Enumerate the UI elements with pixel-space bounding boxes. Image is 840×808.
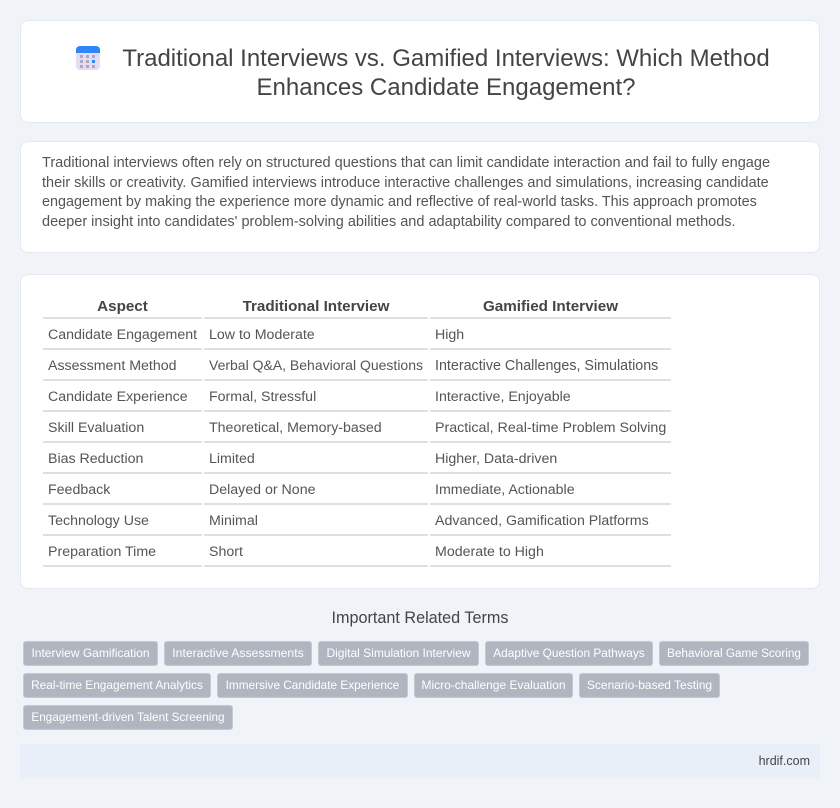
comparison table: Higher, Data-driven [435,451,557,467]
comparison table [43,298,671,567]
comparison table: Interactive Challenges, Simulations [435,358,658,374]
header: Gamified Interview: Gamified Interview [483,298,618,315]
comparison table: Candidate Engagement [48,327,197,343]
comparison table: Bias Reduction [48,451,143,467]
comparison table: High [435,327,464,343]
comparison table: Low to Moderate [209,327,315,343]
related term chips: Digital Simulation Interview [326,646,471,660]
footer bar [20,744,820,778]
intro text: engagement by making the experience more dynamic and reflective of real-world tasks. This approach promotes [42,194,757,210]
related term chips: Behavioral Game Scoring [667,647,801,660]
comparison table: Minimal [209,513,258,529]
comparison table: Feedback [48,482,110,498]
footer source: hrdif.com [759,754,810,768]
comparison table: Moderate to High [435,544,544,560]
title: Enhances Candidate Engagement? [257,74,635,101]
comparison table: Advanced, Gamification Platforms [435,513,649,529]
related term chips: Scenario-based Testing [587,678,712,692]
comparison table: Immediate, Actionable [435,482,575,498]
comparison table: Preparation Time [48,544,156,560]
comparison table: Verbal Q&A, Behavioral Questions [209,357,423,373]
related term chips: Micro-challenge Evaluation [421,678,566,692]
comparison table: Delayed or None [209,482,315,498]
intro text: their skills or creativity. Gamified interviews introduce interactive challenges and simulations, increasing candidate [42,175,769,191]
related term chips: Adaptive Question Pathways [493,646,645,660]
related term chips: Interview Gamification [31,646,150,660]
related term chips [23,641,809,730]
intro text: Traditional interviews often rely on structured questions that can limit candidate interaction and fail to fully engage [42,155,770,171]
related term chips: Real-time Engagement Analytics [31,678,203,692]
related term chips: Engagement-driven Talent Screening [31,711,225,724]
icon: calendar [76,46,100,70]
header: Aspect: Aspect [97,298,148,315]
comparison table: Assessment Method [48,358,177,374]
intro text: deeper insight into candidates' problem-solving abilities and adaptability compared to conventional methods. [42,214,736,230]
comparison table: Practical, Real-time Problem Solving [435,420,666,436]
comparison table: Skill Evaluation [48,420,144,436]
title: Traditional Interviews vs. Gamified Interviews: Which Method [122,45,770,72]
comparison table: Short [209,544,243,560]
comparison table: Theoretical, Memory-based [209,420,382,436]
panel: introduction [20,141,820,253]
title [122,45,770,101]
panel: comparison table [20,274,820,589]
heading: related terms: Important Related Terms [332,609,508,627]
comparison table: Technology Use [48,513,149,529]
comparison table: Candidate Experience [48,389,188,405]
intro text [42,155,770,230]
header: Traditional Interview: Traditional Interview [243,298,389,315]
comparison table: Limited [209,451,255,467]
panel: header [20,20,820,123]
comparison table: Formal, Stressful [209,389,316,405]
comparison table: Interactive, Enjoyable [435,389,571,405]
related term chips: Interactive Assessments [172,646,304,660]
related term chips: Immersive Candidate Experience [226,678,399,692]
